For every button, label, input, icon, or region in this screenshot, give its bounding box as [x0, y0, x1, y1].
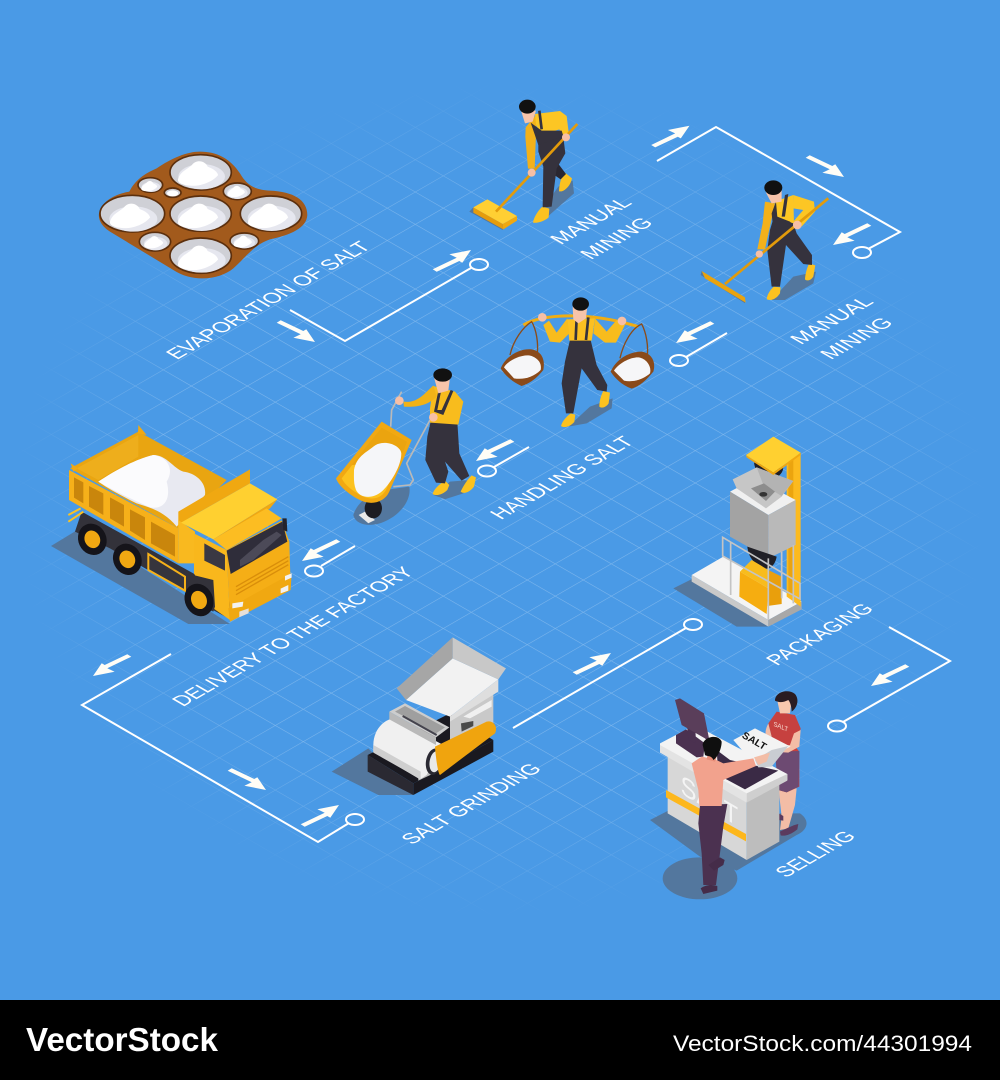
label: manual mining 1: MANUAL [545, 194, 637, 248]
icon: miner with mop [469, 100, 577, 230]
flow line: top right loop [657, 127, 900, 258]
arrow [871, 664, 909, 686]
flow line: to wheelbarrow [478, 447, 529, 476]
label: manual mining 2: MANUAL [785, 293, 879, 348]
arrow [676, 321, 714, 343]
flow line: left loop [82, 654, 364, 842]
label: salt grinding: SALT GRINDING [396, 760, 547, 848]
watermark logo: VectorStock [26, 1021, 219, 1058]
flow line: packaging to selling [828, 627, 950, 732]
label: packaging: PACKAGING [761, 600, 879, 669]
icon: salt grinding machine [332, 637, 506, 795]
label: handling salt: HANDLING SALT [485, 433, 640, 523]
label: manual mining 2: MINING [815, 314, 899, 363]
flow line: grinding to packaging [513, 619, 702, 728]
icon: miner with scraper [701, 180, 828, 303]
arrow [806, 155, 844, 177]
arrow [93, 654, 131, 676]
icon: dump truck with salt [51, 425, 292, 624]
arrow [476, 439, 514, 461]
arrow [433, 250, 471, 272]
watermark bar [0, 1000, 1000, 1080]
icon: worker with yoke baskets [501, 297, 654, 427]
label: manual mining 1: MINING [575, 214, 659, 263]
arrow [301, 805, 339, 827]
arrow [573, 653, 611, 675]
label: delivery to the factory: DELIVERY TO THE FACTORY [167, 564, 419, 710]
flow line: to porter [670, 333, 727, 366]
label: evaporation of salt: EVAPORATION OF SALT [161, 238, 376, 363]
watermark reference number: VectorStock.com/44301994 [673, 1031, 972, 1056]
icon: selling counter with customer and seller: SALT [773, 721, 788, 734]
icon: selling counter with customer and seller: SALT [681, 768, 738, 833]
icon: worker with wheelbarrow [336, 368, 476, 525]
icon: selling counter with customer and seller: SALT [741, 730, 768, 754]
label: manual mining 2 [785, 293, 899, 363]
label: manual mining 1 [545, 194, 659, 263]
label: selling: SELLING [770, 828, 861, 881]
arrow [833, 223, 871, 245]
arrow [302, 539, 340, 561]
icon: selling counter with customer and seller [650, 691, 807, 899]
icon: packaging machine [673, 437, 802, 627]
flow line: to truck [305, 546, 355, 576]
arrow [277, 320, 315, 342]
flow line: evaporation to manual mining [290, 259, 488, 341]
arrow [228, 768, 266, 790]
icon: salt evaporation pans [99, 152, 307, 278]
arrow [651, 126, 690, 147]
